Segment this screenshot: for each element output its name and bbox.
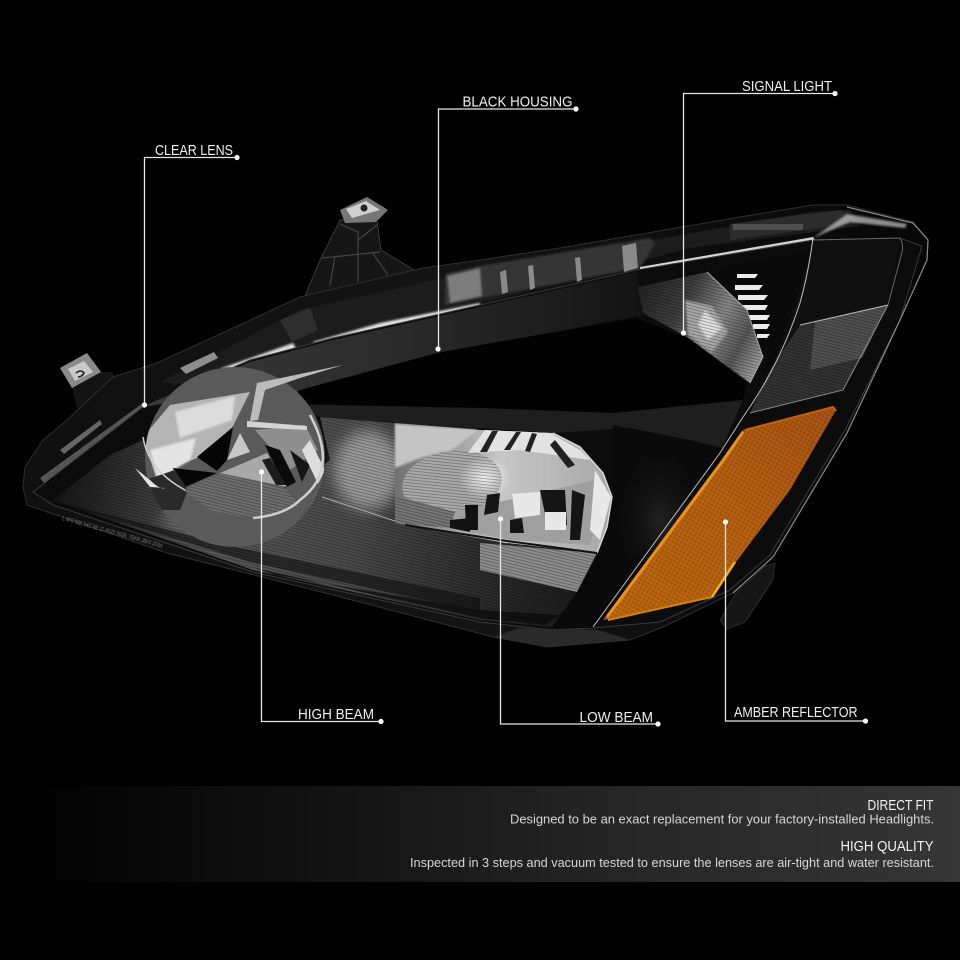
lower lens lip — [493, 628, 630, 647]
panel: lower light reflector strip — [480, 543, 597, 592]
callout: black housing: BLACK HOUSING — [462, 94, 572, 110]
headlight illustration — [23, 197, 928, 647]
panel: signal light lens — [638, 250, 815, 383]
heading: direct fit: DIRECT FIT — [868, 798, 934, 814]
outer right rim highlight — [733, 207, 928, 593]
callout: black housing — [435, 94, 579, 352]
icon: top mounting bracket — [305, 197, 414, 296]
panel: black housing matte frame — [33, 238, 922, 630]
callout: amber reflector: AMBER REFLECTOR — [734, 705, 858, 721]
panel: outer lens shell — [23, 205, 928, 647]
panel: high beam reflector — [135, 367, 325, 547]
callout: clear lens — [142, 143, 240, 408]
matte band above the black recess — [143, 272, 642, 420]
icon: lower right mounting tab — [720, 563, 775, 629]
panel: corner clear lens — [593, 238, 903, 627]
callout: high beam: HIGH BEAM — [298, 707, 374, 723]
panel: low beam reflector — [395, 423, 612, 553]
callout: amber reflector — [723, 519, 868, 724]
panel: black housing recess — [277, 318, 747, 413]
small moulded lens code: L 9F9 96E 54C 9E 11 A52Z 6026, 7SAR J8F0 JD5A — [61, 516, 163, 550]
panel: feature description band — [0, 786, 960, 882]
upper clear lens reflections — [40, 210, 907, 484]
panel: amber reflector — [603, 407, 836, 620]
icon: chevron trim — [250, 365, 343, 421]
icon: left mounting bracket — [60, 353, 118, 412]
panel: lower reflector housing — [53, 417, 597, 627]
callout: low beam: LOW BEAM — [580, 710, 653, 726]
text: direct fit description: Designed to be an exact replacement for your factory-installed Headlights. — [510, 812, 934, 826]
text: high quality description: Inspected in 3 steps and vacuum tested to ensure the lenses are air-tight and water resistant. — [410, 855, 934, 870]
callout: clear lens: CLEAR LENS — [155, 143, 233, 159]
heading: high quality: HIGH QUALITY — [840, 839, 934, 855]
callout: low beam — [498, 516, 661, 727]
callout: signal light: SIGNAL LIGHT — [742, 79, 832, 95]
lower matte band — [270, 400, 743, 448]
panel: right black housing — [552, 420, 745, 628]
callout: high beam — [259, 469, 384, 724]
callout: signal light — [681, 79, 838, 336]
